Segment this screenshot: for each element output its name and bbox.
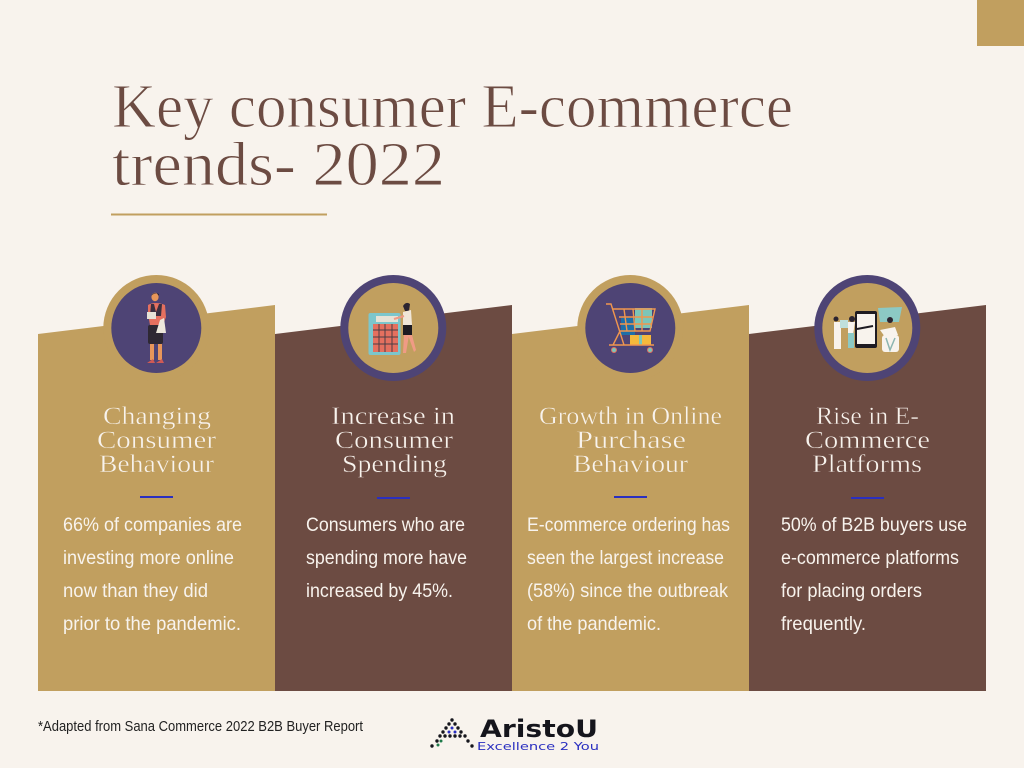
heading: Changing: [103, 403, 212, 430]
heading: Behaviour: [573, 451, 689, 478]
icon: woman with calculator: [368, 303, 416, 355]
heading: [805, 403, 930, 478]
body text: 66% of companies are: [63, 514, 242, 536]
body text: [306, 514, 467, 602]
heading: Platforms: [812, 451, 922, 478]
title: [112, 73, 793, 199]
title: trends- 2022: [112, 131, 445, 199]
body text: [63, 514, 242, 635]
body text: seen the largest increase: [527, 547, 724, 569]
body text: e-commerce platforms: [781, 547, 959, 569]
heading: Spending: [342, 451, 448, 478]
body text: 50% of B2B buyers use: [781, 514, 967, 536]
icon: team around smartphone: [834, 307, 902, 352]
logo: AristoU: Excellence 2 You: [477, 740, 599, 753]
body text: [781, 514, 967, 635]
footnote: *Adapted from Sana Commerce 2022 B2B Buyer Report: [38, 719, 363, 735]
heading: Rise in E-: [816, 403, 919, 430]
icon: man with shopping bag: [147, 293, 166, 363]
heading: Commerce: [805, 427, 930, 454]
heading: [331, 403, 456, 478]
body text: increased by 45%.: [306, 580, 453, 602]
body text: for placing orders: [781, 580, 922, 602]
icon: shopping cart: [606, 304, 655, 352]
body text: (58%) since the outbreak: [527, 580, 728, 602]
panel: increase in consumer spending: [275, 275, 512, 691]
heading: Growth in Online: [539, 403, 722, 430]
body text: spending more have: [306, 547, 467, 569]
icon: dotted triangle: [430, 718, 474, 748]
logo: AristoU: [430, 715, 599, 753]
body text: prior to the pandemic.: [63, 613, 241, 635]
body text: investing more online: [63, 547, 234, 569]
body text: frequently.: [781, 613, 866, 635]
body text: now than they did: [63, 580, 208, 602]
body text: of the pandemic.: [527, 613, 661, 635]
panel: rise in e-commerce platforms: [749, 275, 986, 691]
heading: Consumer: [97, 427, 217, 454]
logo: AristoU: AristoU: [480, 715, 598, 743]
title: Key consumer E-commerce: [112, 73, 793, 141]
heading: Increase in: [331, 403, 456, 430]
corner accent square: [977, 0, 1024, 46]
panel: changing consumer behaviour: [38, 275, 275, 691]
heading: Behaviour: [99, 451, 215, 478]
heading: [539, 403, 722, 478]
heading: Purchase: [576, 427, 686, 454]
body text: E-commerce ordering has: [527, 514, 730, 536]
heading: Consumer: [335, 427, 454, 454]
body text: [527, 514, 730, 635]
body text: Consumers who are: [306, 514, 465, 536]
heading: [97, 403, 217, 478]
panel: growth in online purchase behaviour: [512, 275, 749, 691]
